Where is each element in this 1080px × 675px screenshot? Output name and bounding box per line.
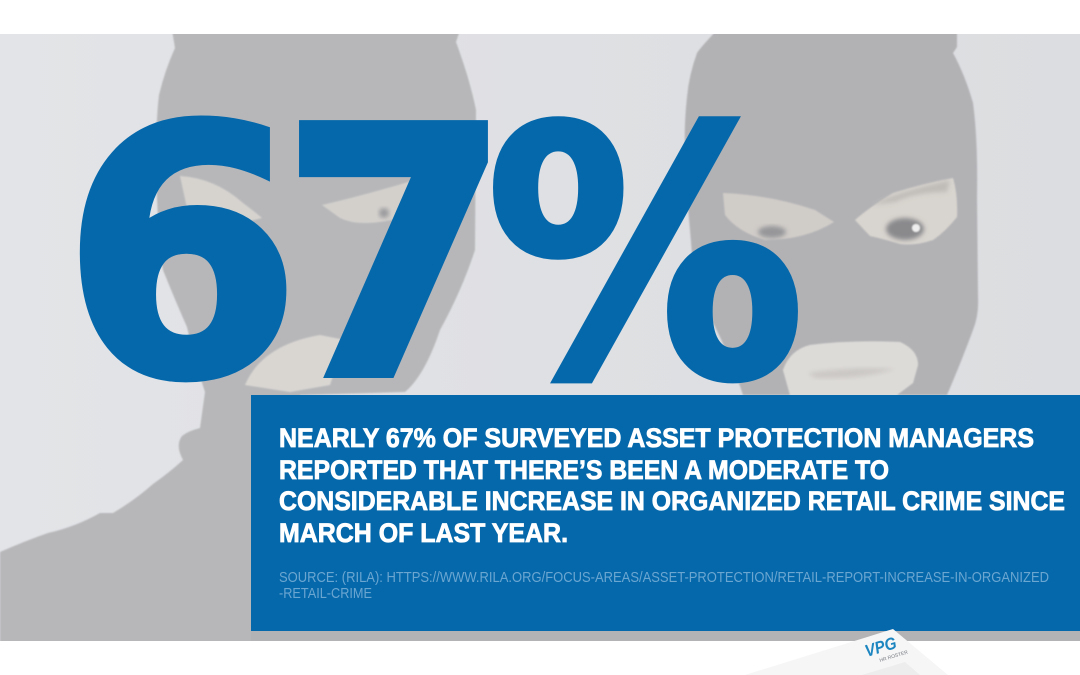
logo: VPG — [863, 633, 899, 661]
main statement: NEARLY 67% OF SURVEYED ASSET PROTECTION MANAGERS — [279, 423, 1034, 453]
right masked figure — [685, 30, 978, 395]
right figure left eye — [723, 193, 834, 240]
right figure mouth and nose — [783, 341, 918, 395]
main statement: REPORTED THAT THERE’S BEEN A MODERATE TO — [279, 455, 889, 485]
blue text panel — [251, 395, 1080, 631]
digit 7: 7 — [282, 58, 509, 454]
logo caption: HR ROSTER — [879, 649, 909, 664]
digit 6: 6 — [62, 56, 301, 456]
right figure right eye — [855, 178, 957, 244]
main statement — [279, 423, 1065, 548]
left figure mouth — [245, 335, 345, 392]
left figure eyes — [180, 176, 415, 224]
grey strip under text panel — [251, 631, 1080, 641]
left masked figure — [0, 30, 476, 645]
big number 67% — [62, 56, 805, 457]
percent sign: % — [486, 56, 805, 457]
source citation — [279, 569, 1049, 602]
document sheet with logo — [745, 629, 948, 675]
source citation: -RETAIL-CRIME — [279, 585, 372, 602]
main statement: MARCH OF LAST YEAR. — [279, 518, 568, 548]
